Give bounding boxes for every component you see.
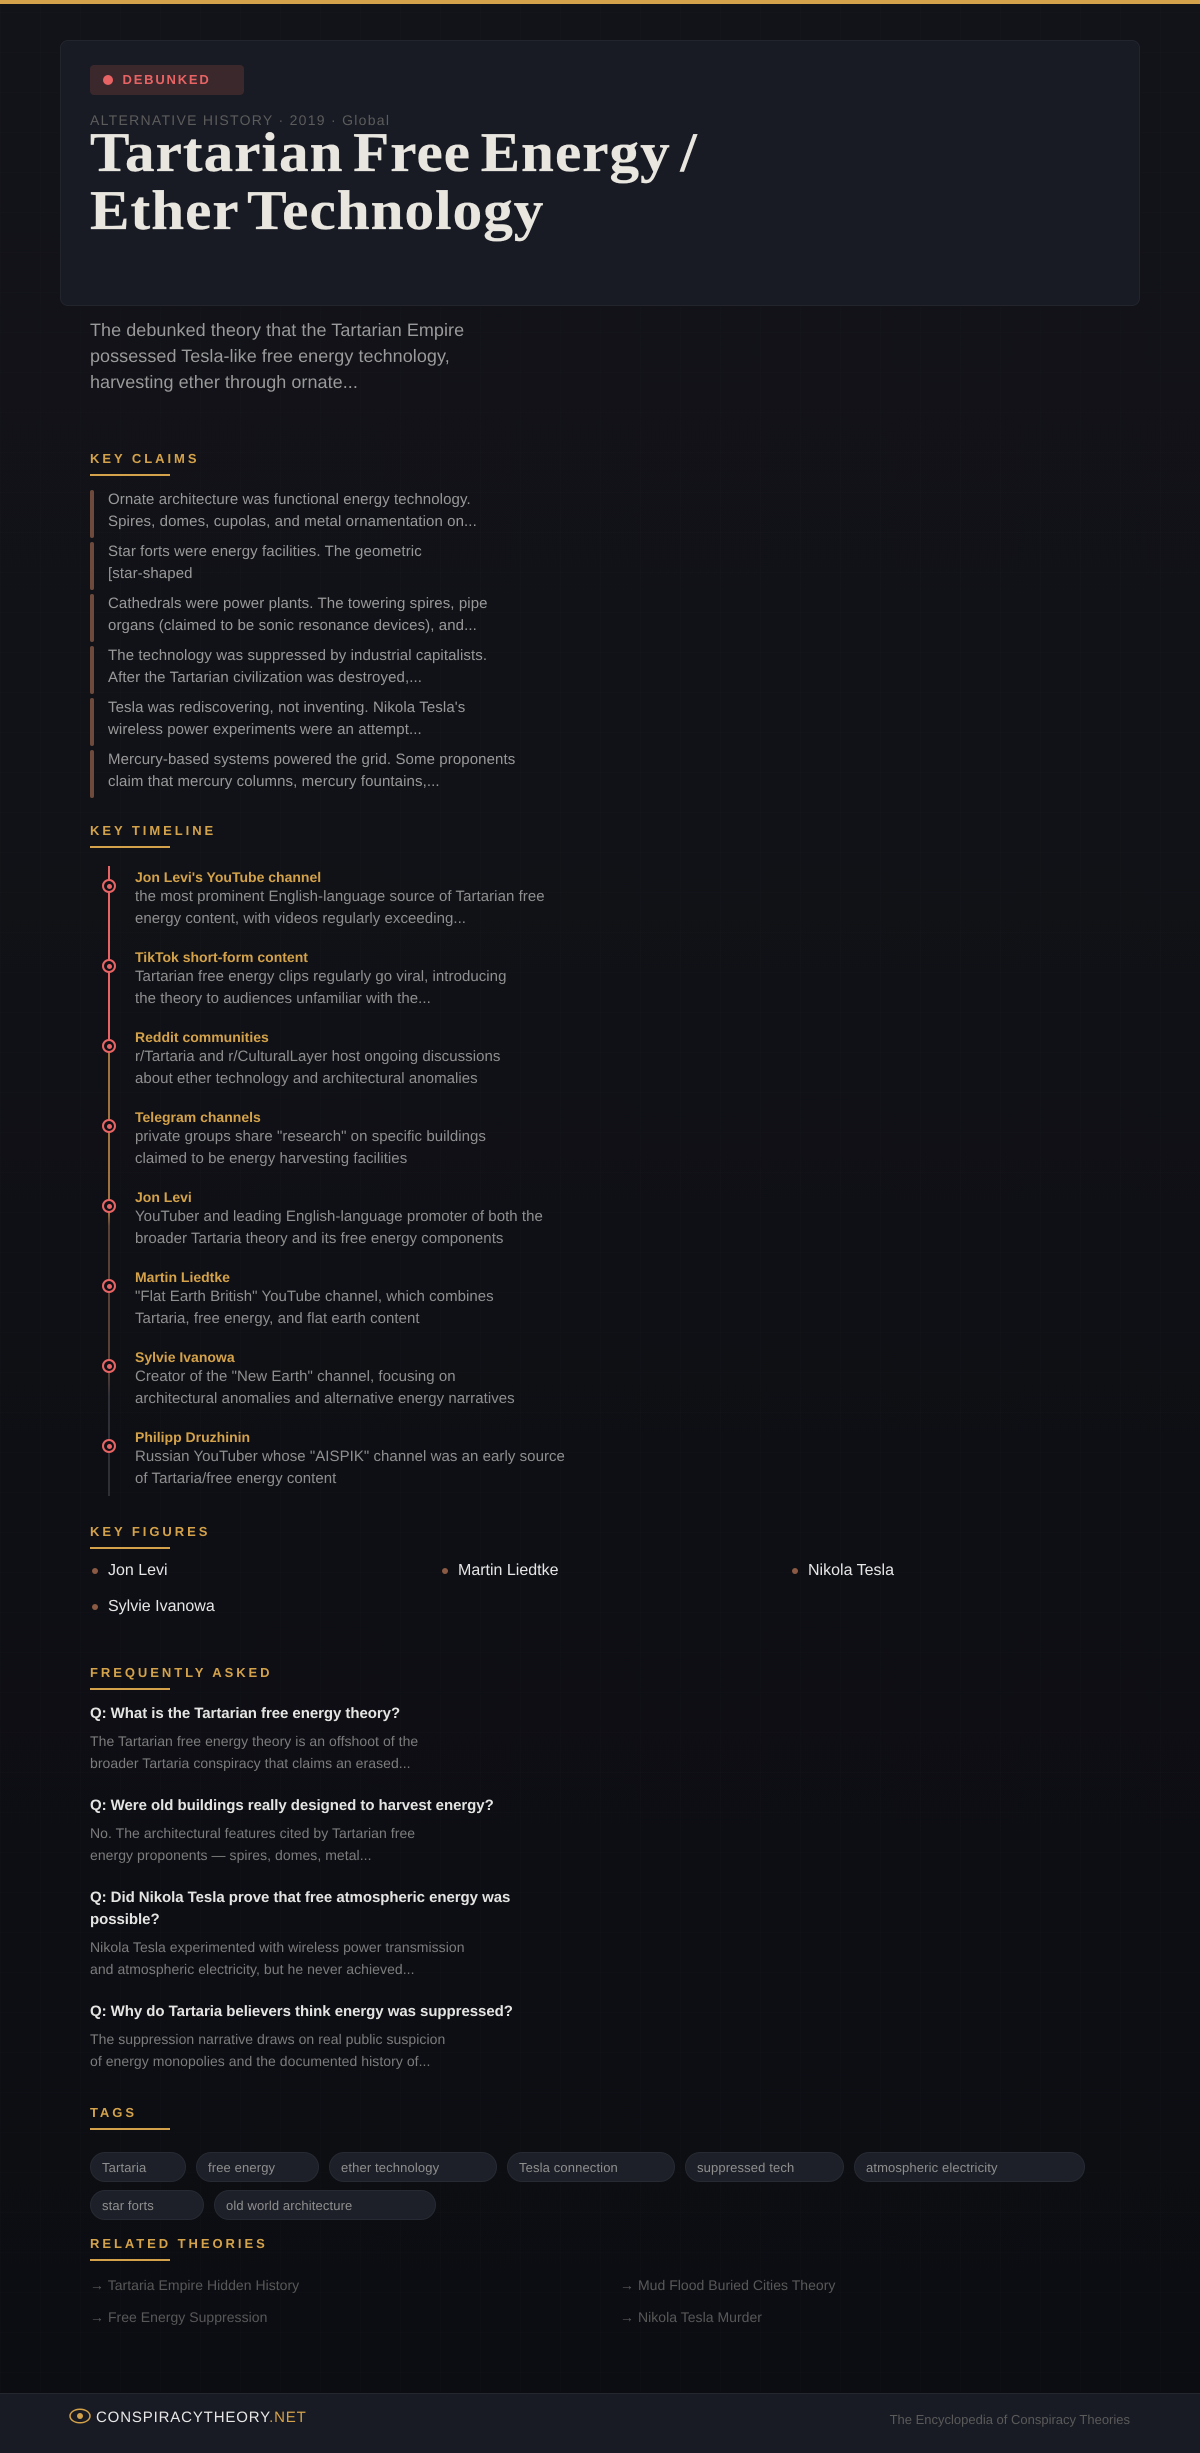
heading: key timeline: KEY TIMELINE [90, 823, 216, 838]
claim 4: The technology was suppressed by industrial capitalists. [108, 647, 487, 664]
timeline item 8: Philipp Druzhinin [135, 1429, 250, 1445]
tag [507, 2152, 675, 2182]
timeline item 3: r/Tartaria and r/CulturalLayer host ongoing discussions [135, 1048, 500, 1065]
faq 2: Q: Were old buildings really designed to harvest energy? [90, 1797, 494, 1814]
footer logo text: CONSPIRACYTHEORY.NET [96, 2409, 307, 2426]
badge label: DEBUNKED [122, 72, 211, 87]
timeline item 7: architectural anomalies and alternative energy narratives [135, 1390, 515, 1407]
heading: tags: TAGS [90, 2105, 137, 2120]
timeline item 8: Russian YouTuber whose "AISPIK" channel was an early source [135, 1448, 565, 1465]
lede text [90, 320, 464, 392]
claim 6 [90, 750, 515, 798]
timeline item 3: Reddit communities [135, 1029, 269, 1045]
claim 3: Cathedrals were power plants. The towering spires, pipe [108, 595, 488, 612]
tag: star forts [102, 2198, 154, 2213]
lede text: harvesting ether through ornate... [90, 372, 358, 392]
timeline item 1 [102, 869, 545, 927]
faq 2: energy proponents — spires, domes, metal... [90, 1847, 372, 1863]
timeline item 8: of Tartaria/free energy content [135, 1470, 336, 1487]
faq 2: No. The architectural features cited by Tartarian free [90, 1825, 415, 1841]
icon: status dot [103, 75, 113, 85]
footer tagline: The Encyclopedia of Conspiracy Theories [890, 2412, 1130, 2427]
tag: atmospheric electricity [866, 2160, 998, 2175]
key figures list [92, 1562, 894, 1615]
timeline item 2 [102, 949, 506, 1007]
timeline item 6: "Flat Earth British" YouTube channel, which combines [135, 1288, 494, 1305]
claim 1: Ornate architecture was functional energy technology. [108, 491, 471, 508]
figure: Jon Levi: Jon Levi [108, 1562, 168, 1579]
claim 5: wireless power experiments were an attempt... [108, 721, 422, 738]
timeline item 1: the most prominent English-language source of Tartarian free [135, 888, 545, 905]
badge: debunked [90, 65, 244, 95]
tag: Tesla connection [519, 2160, 618, 2175]
panel: hero [60, 40, 1140, 306]
faq 2 [90, 1797, 494, 1863]
claim 2: Star forts were energy facilities. The geometric [108, 543, 422, 560]
timeline item 5 [102, 1189, 543, 1247]
lede text: possessed Tesla-like free energy technology, [90, 346, 450, 366]
figure: Nikola Tesla: Nikola Tesla [808, 1562, 894, 1579]
timeline item 4: Telegram channels [135, 1109, 261, 1125]
timeline item 2: TikTok short-form content [135, 949, 308, 965]
faq 4 [90, 2003, 513, 2069]
faq 1: The Tartarian free energy theory is an offshoot of the [90, 1733, 418, 1749]
title: Tartarian Free Energy / [90, 122, 698, 184]
heading: related theories: RELATED THEORIES [90, 2236, 268, 2251]
tags [90, 2152, 1085, 2220]
timeline item 5: broader Tartaria theory and its free energy components [135, 1230, 503, 1247]
faq 4: Q: Why do Tartaria believers think energy was suppressed? [90, 2003, 513, 2020]
related theories links [90, 2277, 836, 2325]
faq 3: Nikola Tesla experimented with wireless power transmission [90, 1939, 465, 1955]
faq 1: Q: What is the Tartarian free energy theory? [90, 1705, 400, 1722]
claim 5: Tesla was rediscovering, not inventing. Nikola Tesla's [108, 699, 465, 716]
claim 4: After the Tartarian civilization was destroyed,... [108, 669, 422, 686]
link: → Tartaria Empire Hidden History [90, 2277, 299, 2293]
link: → Mud Flood Buried Cities Theory [620, 2277, 835, 2293]
tag [196, 2152, 319, 2182]
faq 3: possible? [90, 1911, 160, 1928]
tag: suppressed tech [697, 2160, 794, 2175]
faq 1: broader Tartaria conspiracy that claims an erased... [90, 1755, 411, 1771]
link: → Nikola Tesla Murder [620, 2309, 762, 2325]
heading: key claims: KEY CLAIMS [90, 451, 199, 466]
figure: Sylvie Ivanowa: Sylvie Ivanowa [108, 1598, 215, 1615]
timeline item 1: energy content, with videos regularly exceeding... [135, 910, 466, 927]
timeline item 2: the theory to audiences unfamiliar with the... [135, 990, 431, 1007]
claim 6: claim that mercury columns, mercury fountains,... [108, 773, 440, 790]
heading: key figures: KEY FIGURES [90, 1524, 210, 1539]
timeline item 6 [102, 1269, 494, 1327]
footer [0, 2393, 1200, 2453]
claim 6: Mercury-based systems powered the grid. Some proponents [108, 751, 515, 768]
tag: ether technology [341, 2160, 439, 2175]
timeline [102, 866, 565, 1496]
tag: old world architecture [226, 2198, 352, 2213]
faq 3: and atmospheric electricity, but he never achieved... [90, 1961, 415, 1977]
claim 1 [90, 490, 477, 538]
timeline item 2: Tartarian free energy clips regularly go viral, introducing [135, 968, 506, 985]
figure: Martin Liedtke: Martin Liedtke [458, 1562, 558, 1579]
panel: key claims list [90, 490, 515, 798]
claim 3: organs (claimed to be sonic resonance devices), and... [108, 617, 477, 634]
title: Ether Technology [90, 180, 544, 242]
timeline item 5: YouTuber and leading English-language promoter of both the [135, 1208, 543, 1225]
claim 1: Spires, domes, cupolas, and metal ornamentation on... [108, 513, 477, 530]
tag [90, 2152, 186, 2182]
heading: frequently asked: FREQUENTLY ASKED [90, 1665, 273, 1680]
tag [329, 2152, 497, 2182]
claim 5 [90, 698, 465, 746]
tag: free energy [208, 2160, 275, 2175]
claim 2: [star-shaped [108, 565, 193, 582]
faq 4: The suppression narrative draws on real public suspicion [90, 2031, 445, 2047]
timeline item 7 [102, 1349, 515, 1407]
faq 3: Q: Did Nikola Tesla prove that free atmospheric energy was [90, 1889, 510, 1906]
claim 4 [90, 646, 487, 694]
timeline item 4: private groups share "research" on specific buildings [135, 1128, 486, 1145]
timeline item 3: about ether technology and architectural anomalies [135, 1070, 478, 1087]
tag [214, 2190, 436, 2220]
tag [90, 2190, 204, 2220]
timeline item 8 [102, 1429, 565, 1487]
top accent bar [0, 0, 1200, 4]
faq 3 [90, 1889, 510, 1977]
timeline item 3 [102, 1029, 500, 1087]
tag [685, 2152, 844, 2182]
category meta line: ALTERNATIVE HISTORY · 2019 · Global [90, 112, 390, 128]
timeline item 6: Martin Liedtke [135, 1269, 230, 1285]
timeline item 7: Creator of the "New Earth" channel, focusing on [135, 1368, 456, 1385]
tag [854, 2152, 1085, 2182]
icon: eye logo [69, 2408, 91, 2424]
claim 2 [90, 542, 422, 590]
claim 3 [90, 594, 488, 642]
title [90, 122, 698, 242]
timeline item 7: Sylvie Ivanowa [135, 1349, 235, 1365]
tag: Tartaria [102, 2160, 146, 2175]
timeline line [108, 866, 110, 1496]
faq 1 [90, 1705, 418, 1771]
timeline item 4: claimed to be energy harvesting facilities [135, 1150, 407, 1167]
lede text: The debunked theory that the Tartarian Empire [90, 320, 464, 340]
link: → Free Energy Suppression [90, 2309, 267, 2325]
timeline item 6: Tartaria, free energy, and flat earth content [135, 1310, 420, 1327]
timeline item 4 [102, 1109, 486, 1167]
faq 4: of energy monopolies and the documented history of... [90, 2053, 430, 2069]
timeline item 5: Jon Levi [135, 1189, 192, 1205]
timeline item 1: Jon Levi's YouTube channel [135, 869, 321, 885]
